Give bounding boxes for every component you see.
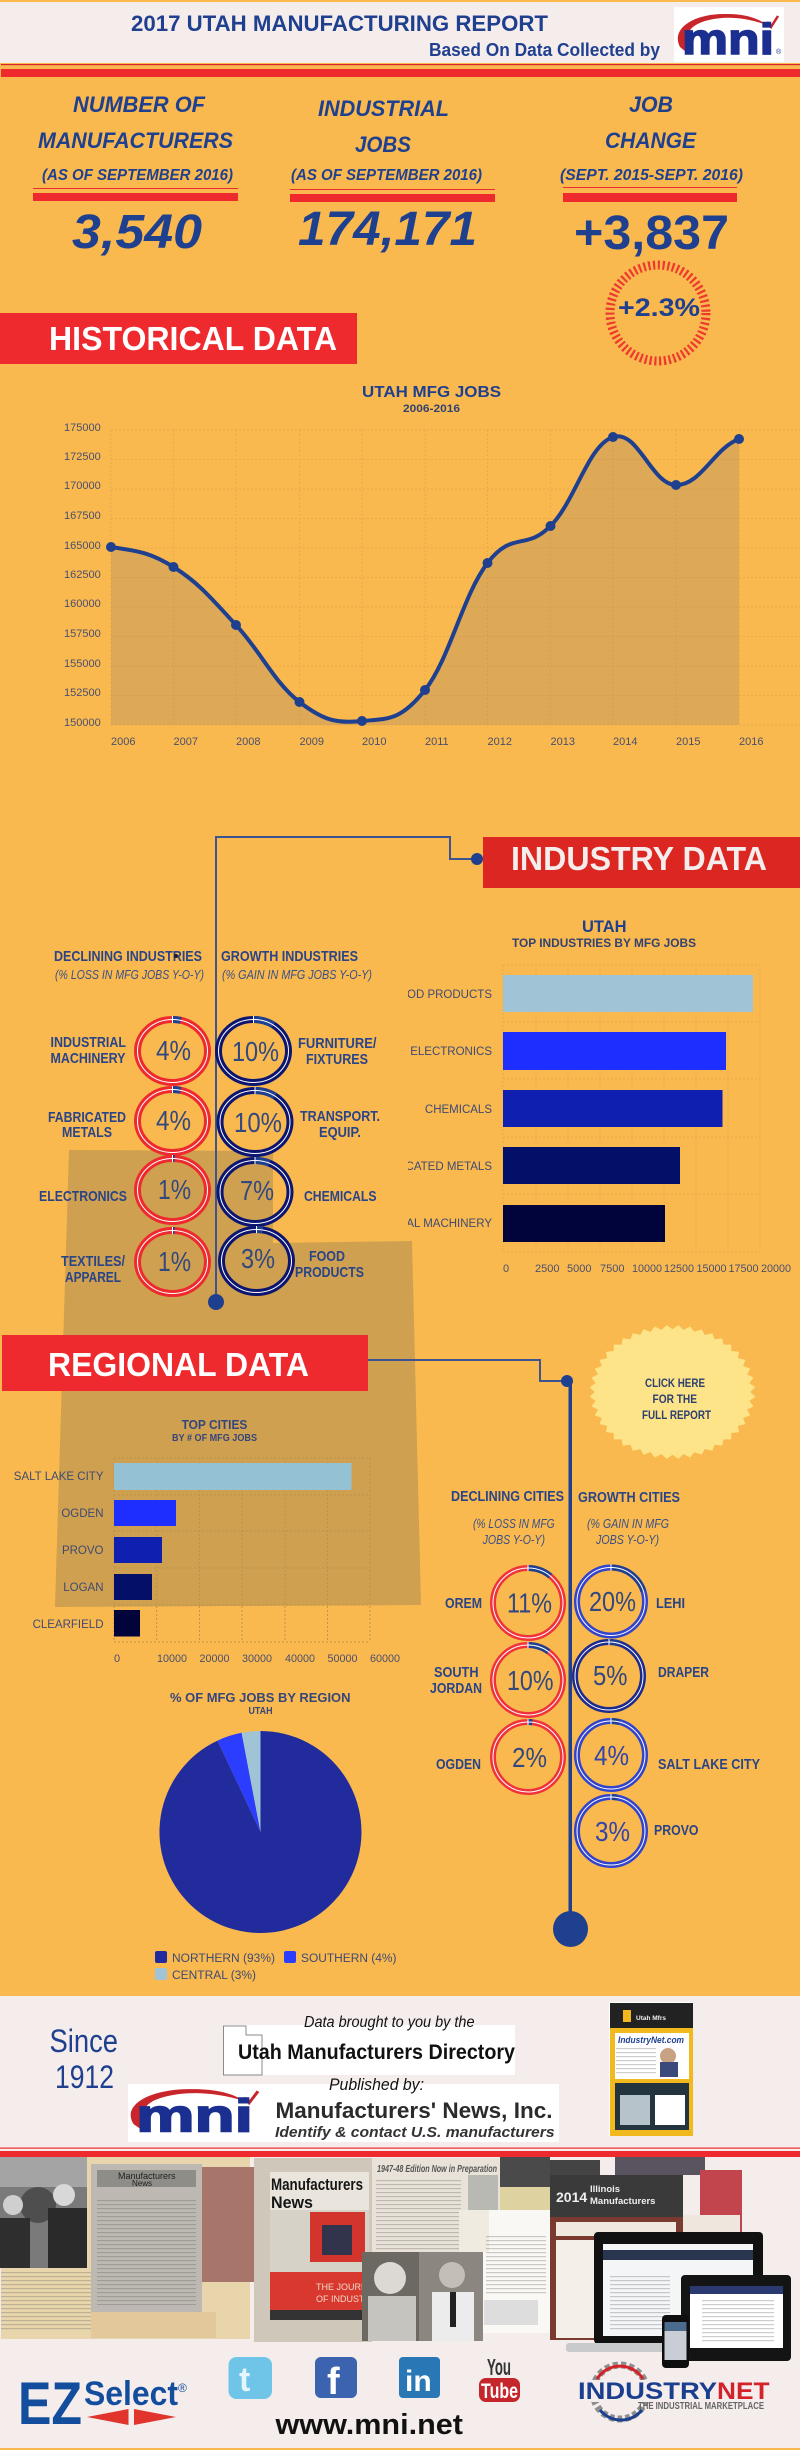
laptop	[566, 2232, 766, 2352]
percent values: industries: 4%	[156, 1035, 191, 1066]
bar chart: top industries: CHEMICALS	[425, 1104, 492, 1116]
percent values: industries: 7%	[240, 1175, 274, 1206]
logo: EZ Select: Select	[84, 2375, 178, 2413]
credit: utah manufacturers directory	[223, 2014, 515, 2075]
pie chart: jobs by region: % OF MFG JOBS BY REGION	[170, 1691, 350, 1705]
icon: youtube	[479, 2354, 520, 2403]
icon: mni logo: mni	[682, 15, 774, 64]
bar chart: top industries: 17500	[728, 1263, 758, 1275]
bar chart: top industries: 20000	[761, 1263, 791, 1275]
icon: youtube: You	[487, 2354, 511, 2380]
stat: industrial jobs: 174,171	[298, 203, 477, 256]
percent values: cities: 11%	[507, 1588, 552, 1618]
labels: cities: OREM	[445, 1595, 482, 1612]
labels: cities: SALT LAKE CITY	[658, 1756, 760, 1773]
line chart: Utah mfg jobs: 2010	[362, 736, 386, 748]
line chart: Utah mfg jobs: 167500	[64, 510, 101, 522]
line chart: Utah mfg jobs: 2008	[236, 736, 260, 748]
magazine cover	[254, 2158, 379, 2342]
stat: industrial jobs	[290, 96, 495, 256]
labels: industries: EQUIP.	[319, 1124, 361, 1141]
bar chart: top industries	[408, 920, 791, 1272]
bar chart: top industries: ELECTRONICS	[410, 1046, 492, 1058]
magazine cover: News	[271, 2193, 313, 2212]
percent values: industries: 10%	[234, 1107, 282, 1138]
labels: industries: FIXTURES	[306, 1051, 368, 1068]
footer panel	[0, 1996, 800, 2448]
book: directory cover	[609, 2002, 693, 2136]
percent values: cities: 5%	[593, 1660, 628, 1691]
bar chart: top cities: 60000	[370, 1653, 400, 1665]
line chart: Utah mfg jobs: 2009	[300, 736, 324, 748]
icon: facebook: f	[327, 2361, 340, 2403]
bar chart: top industries: TOP INDUSTRIES BY MFG JOBS	[512, 938, 696, 950]
directories stack: 2014	[556, 2189, 587, 2205]
credit: utah manufacturers directory: Utah Manufacturers Directory	[238, 2041, 515, 2064]
labels: cities: DRAPER	[658, 1664, 709, 1681]
stat: job change: +3,837	[574, 207, 729, 260]
percent values: industries: 4%	[156, 1105, 191, 1136]
labels: industries: INDUSTRIAL	[50, 1034, 126, 1051]
rings: declining cities	[493, 1565, 563, 1792]
percent values: industries	[156, 1035, 282, 1277]
stat: number of manufacturers: 3,540	[72, 206, 202, 259]
since 1912: 1912	[55, 2059, 114, 2095]
bar chart: top cities: TOP CITIES	[182, 1418, 247, 1432]
subtitle: Based On Data Collected by	[429, 40, 660, 60]
bar chart: top cities: LOGAN	[63, 1582, 104, 1594]
stat: number of manufacturers: MANUFACTURERS	[38, 128, 233, 153]
heading: industry data: INDUSTRY DATA	[511, 840, 767, 877]
icon: facebook	[315, 2357, 357, 2403]
newsletter page: Manufacturers	[118, 2171, 176, 2181]
panel: declining and growth industries: (% GAIN IN MFG JOBS Y-O-Y)	[222, 967, 372, 982]
percent values: industries: 3%	[241, 1243, 275, 1274]
bar chart: top industries: 2500	[535, 1263, 559, 1275]
logo: EZ Select: EZ	[18, 2370, 82, 2437]
pie chart: jobs by region	[155, 1691, 397, 1982]
line chart: Utah mfg jobs: 2015	[676, 736, 700, 748]
archival sheet	[372, 2158, 500, 2253]
bar chart: top cities: CLEARFIELD	[33, 1619, 104, 1631]
labels: industries: CHEMICALS	[304, 1188, 376, 1205]
panel: declining and growth cities: GROWTH CITIES	[578, 1490, 680, 1506]
icon: twitter: t	[239, 2361, 250, 2399]
logo: EZ Select	[18, 2370, 187, 2437]
since 1912: Since	[50, 2023, 118, 2059]
line chart: Utah mfg jobs: UTAH MFG JOBS	[362, 384, 501, 401]
credit: published by	[128, 2075, 559, 2142]
labels: industries: FOOD	[309, 1248, 345, 1265]
percent values: cities: 2%	[512, 1742, 547, 1773]
heading: regional data: REGIONAL DATA	[48, 1346, 309, 1383]
pie legend: SOUTHERN (4%)	[301, 1953, 397, 1965]
line chart: Utah mfg jobs	[64, 384, 800, 748]
credit: utah manufacturers directory: Data brought to you by the	[304, 2014, 475, 2031]
icon: youtube: Tube	[481, 2380, 518, 2403]
directories stack: Illinois	[590, 2184, 620, 2195]
heading: regional data	[2, 1335, 368, 1391]
labels: industries: APPAREL	[65, 1269, 121, 1286]
labels: industries: TRANSPORT.	[300, 1108, 380, 1125]
callout: click here for the full report: FULL REPORT	[642, 1410, 711, 1422]
bar chart: top industries: 10000	[632, 1263, 662, 1275]
magazine cover: THE JOURNAL	[316, 2282, 379, 2292]
old photo	[0, 2157, 87, 2268]
newsletter page: News	[132, 2179, 152, 2188]
bar chart: top industries: INDUSTRIAL MACHINERY	[352, 1218, 492, 1230]
line chart: Utah mfg jobs: 157500	[64, 628, 101, 640]
panel: declining and growth cities: JOBS Y-O-Y)	[595, 1532, 659, 1547]
line chart: Utah mfg jobs: 150000	[64, 717, 101, 729]
percent values: cities: 10%	[507, 1665, 554, 1696]
icon: linkedin	[399, 2357, 440, 2398]
line chart: Utah mfg jobs: 2016	[739, 736, 763, 748]
archival sheet: 1947-48 Edition Now in Preparation	[377, 2164, 497, 2175]
labels: cities: SOUTH	[434, 1664, 478, 1681]
bar chart: top cities: 30000	[242, 1653, 272, 1665]
heading: historical data	[0, 313, 357, 364]
book: directory cover: Utah Mfrs	[636, 2015, 666, 2022]
line chart: Utah mfg jobs: 2014	[613, 736, 637, 748]
logo: EZ Select: ®	[178, 2381, 187, 2395]
icon: mni logo	[674, 7, 784, 64]
labels: cities: PROVO	[654, 1822, 699, 1839]
bar chart: top cities: 40000	[285, 1653, 315, 1665]
percent values: industries: 1%	[158, 1246, 191, 1277]
bar chart: top cities: SALT LAKE CITY	[14, 1471, 104, 1483]
pie legend: NORTHERN (93%)	[172, 1953, 275, 1965]
stat: number of manufacturers: NUMBER OF	[73, 92, 206, 117]
callout: click here for the full report	[590, 1325, 755, 1459]
labels: cities: JORDAN	[430, 1680, 482, 1697]
line chart: Utah mfg jobs: 155000	[64, 658, 101, 670]
header band	[0, 2, 800, 77]
bar chart: top industries: 0	[503, 1263, 509, 1275]
line chart: Utah mfg jobs: 152500	[64, 687, 101, 699]
line chart: Utah mfg jobs: 170000	[64, 480, 101, 492]
icon: twitter	[228, 2357, 272, 2399]
rings: growth industries	[218, 1016, 292, 1292]
line chart: Utah mfg jobs: 175000	[64, 422, 101, 434]
directories stack: Manufacturers	[590, 2196, 655, 2207]
labels: industries: PRODUCTS	[295, 1264, 364, 1281]
logo: IndustryNet: THE INDUSTRIAL MARKETPLACE	[638, 2401, 764, 2412]
stat: number of manufacturers: (AS OF SEPTEMBER 2016)	[42, 167, 233, 184]
credit: published by: Manufacturers' News, Inc.	[276, 2098, 552, 2123]
icon: linkedin: in	[405, 2365, 432, 2398]
title: 2017 UTAH MANUFACTURING REPORT	[131, 11, 549, 36]
bar chart: top industries: 5000	[567, 1263, 591, 1275]
stat: job change: JOB	[629, 92, 673, 117]
line chart: Utah mfg jobs: 172500	[64, 451, 101, 463]
credit: published by: mni	[136, 2089, 253, 2141]
callout: click here for the full report: CLICK HERE	[645, 1378, 705, 1390]
bar chart: top industries: 15000	[696, 1263, 726, 1275]
newsletter page	[91, 2164, 202, 2312]
since 1912	[50, 2023, 118, 2095]
stat: job change	[560, 92, 743, 260]
badge: +2.3% ring	[610, 265, 706, 361]
bar chart: top industries: UTAH	[582, 917, 626, 936]
line chart: Utah mfg jobs: 2011	[425, 736, 449, 748]
tablet	[681, 2275, 791, 2361]
heading: historical data: HISTORICAL DATA	[49, 320, 337, 357]
percent values: cities: 3%	[595, 1816, 630, 1847]
photo collage: company history	[0, 2157, 791, 2368]
bar chart: top industries: 7500	[600, 1263, 624, 1275]
labels: industries: METALS	[62, 1124, 112, 1141]
line chart: Utah mfg jobs: 162500	[64, 569, 101, 581]
connector: industry data	[208, 837, 483, 1310]
line chart: Utah mfg jobs: 2012	[488, 736, 512, 748]
stat: industrial jobs: JOBS	[355, 132, 411, 157]
line chart: Utah mfg jobs: 2006	[111, 736, 135, 748]
panel: declining and growth industries: GROWTH INDUSTRIES	[221, 948, 358, 965]
magazine cover: OF INDUSTRY	[316, 2294, 377, 2304]
heading: industry data	[483, 837, 800, 888]
logo: IndustryNet: INDUSTRY	[578, 2378, 717, 2405]
panel: declining and growth cities: (% GAIN IN MFG	[587, 1516, 669, 1531]
connector: regional data	[368, 1360, 588, 1947]
rings: declining industries	[138, 1016, 208, 1294]
logo: IndustryNet	[578, 2365, 770, 2420]
rings: growth cities	[575, 1564, 645, 1865]
labels: cities: OGDEN	[436, 1756, 481, 1773]
panel: declining and growth cities	[430, 1489, 760, 1865]
book: directory cover: IndustryNet.com	[618, 2035, 684, 2045]
labels: industries: ELECTRONICS	[39, 1188, 127, 1205]
pie legend: CENTRAL (3%)	[172, 1970, 256, 1982]
icon: mni logo: ®	[776, 48, 782, 56]
labels: cities: LEHI	[656, 1595, 685, 1612]
magazine cover: Manufacturers	[271, 2175, 363, 2194]
panel: declining and growth cities: DECLINING CITIES	[451, 1489, 564, 1505]
credit: published by: Published by:	[329, 2075, 424, 2094]
bar chart: top industries: FOOD PRODUCTS	[391, 989, 492, 1001]
percent values: industries: 10%	[232, 1036, 279, 1067]
labels: cities	[430, 1595, 760, 1839]
panel: declining and growth industries: (% LOSS IN MFG JOBS Y-O-Y)	[55, 967, 204, 982]
divider: footer red rule	[0, 2148, 800, 2157]
directories stack	[500, 2157, 742, 2340]
percent values: cities: 20%	[589, 1586, 636, 1617]
line chart: Utah mfg jobs: 2006-2016	[403, 403, 460, 415]
panel: declining and growth cities: (% LOSS IN MFG	[473, 1516, 555, 1531]
labels: industries	[39, 1034, 380, 1286]
phone	[662, 2315, 689, 2368]
bar chart: top industries: 12500	[664, 1263, 694, 1275]
stat: job change: (SEPT. 2015-SEPT. 2016)	[560, 167, 743, 184]
callout: click here for the full report: FOR THE	[652, 1394, 697, 1406]
portrait photos	[362, 2252, 483, 2341]
stat: job change: CHANGE	[605, 128, 697, 153]
logo: IndustryNet: NET	[717, 2378, 770, 2405]
utah state silhouette	[55, 1150, 421, 1607]
bar chart: top cities: PROVO	[62, 1545, 104, 1557]
stat: industrial jobs: INDUSTRIAL	[318, 96, 449, 121]
stat: number of manufacturers	[33, 92, 238, 259]
report printout	[459, 2210, 551, 2333]
bar chart: top cities: 0	[114, 1653, 120, 1665]
labels: industries: MACHINERY	[50, 1050, 126, 1067]
stat: industrial jobs: (AS OF SEPTEMBER 2016)	[291, 167, 482, 184]
percent values: industries: 1%	[158, 1174, 191, 1205]
bar chart: top cities: OGDEN	[61, 1508, 104, 1520]
maroon book	[202, 2167, 255, 2282]
bar chart: top cities: 10000	[157, 1653, 187, 1665]
labels: industries: TEXTILES/	[61, 1253, 126, 1270]
line chart: Utah mfg jobs: 160000	[64, 598, 101, 610]
open book	[1, 2157, 250, 2339]
line chart: Utah mfg jobs: 165000	[64, 540, 101, 552]
bar chart: top cities: 20000	[200, 1653, 230, 1665]
bar chart: top cities: BY # OF MFG JOBS	[172, 1433, 257, 1444]
line chart: Utah mfg jobs: 2007	[174, 736, 198, 748]
percent values: cities	[507, 1586, 636, 1847]
pie chart: jobs by region: UTAH	[248, 1706, 272, 1717]
panel: declining and growth industries	[39, 948, 380, 1294]
website url: www.mni.net	[274, 2409, 463, 2441]
line chart: Utah mfg jobs: 2013	[550, 736, 575, 748]
panel: declining and growth industries: DECLINING INDUSTRIES	[54, 948, 202, 965]
credit: published by: Identify & contact U.S. manufacturers	[275, 2124, 555, 2141]
bar chart: top industries: FABRICATED METALS	[372, 1161, 492, 1173]
bar chart: top cities	[14, 1418, 400, 1665]
labels: industries: FABRICATED	[48, 1109, 126, 1126]
labels: industries: FURNITURE/	[298, 1035, 377, 1052]
bar chart: top cities: 50000	[328, 1653, 358, 1665]
pie legend	[155, 1951, 397, 1982]
badge: +2.3% ring: +2.3%	[618, 294, 700, 322]
percent values: cities: 4%	[594, 1740, 629, 1771]
panel: declining and growth cities: JOBS Y-O-Y)	[482, 1532, 545, 1547]
